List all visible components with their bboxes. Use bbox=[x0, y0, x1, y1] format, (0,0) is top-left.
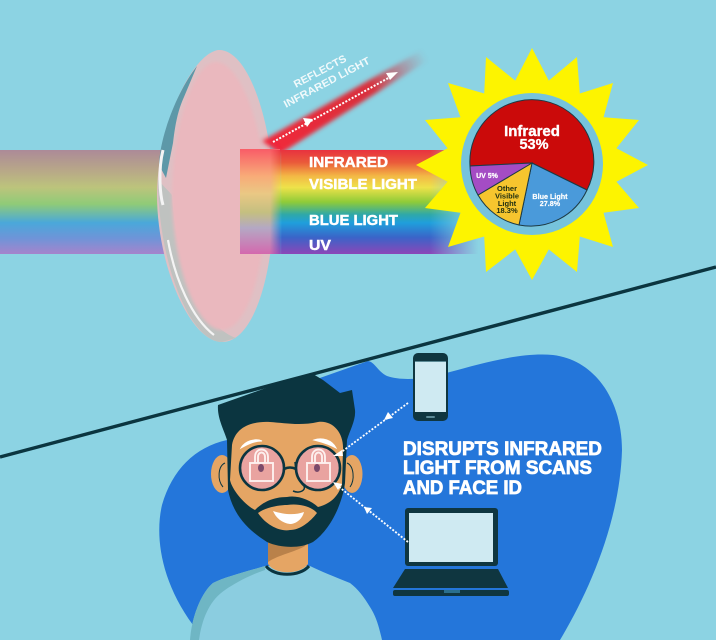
face bbox=[230, 422, 343, 510]
rainbow light beam entering lens bbox=[0, 150, 170, 254]
disrupts caption: LIGHT FROM SCANS bbox=[403, 457, 592, 479]
chin skin bbox=[258, 504, 317, 530]
lens bbox=[157, 50, 274, 342]
shirt bbox=[190, 566, 382, 640]
pie labels: Blue Light bbox=[532, 192, 568, 201]
reflects label: REFLECTS bbox=[292, 53, 349, 91]
divider line bbox=[0, 267, 716, 457]
band labels: INFRARED bbox=[309, 155, 388, 171]
band labels bbox=[309, 155, 417, 254]
band labels: VISIBLE LIGHT bbox=[309, 177, 417, 193]
glasses bbox=[240, 446, 340, 490]
disrupts caption bbox=[403, 438, 602, 499]
ears bbox=[211, 455, 362, 493]
pie labels: 18.3% bbox=[496, 206, 518, 215]
dotted arrow: reflected ray bbox=[273, 72, 398, 142]
sun with pie chart bbox=[416, 48, 648, 280]
rainbow band inside lens bbox=[240, 149, 280, 254]
band labels: UV bbox=[309, 238, 331, 254]
disrupts caption: DISRUPTS INFRARED bbox=[403, 438, 602, 460]
pie labels: 27.8% bbox=[540, 199, 561, 208]
dotted arrow: phone to eye bbox=[333, 403, 408, 456]
eye dots bbox=[258, 464, 264, 472]
pie chart bbox=[470, 100, 594, 226]
laptop icon bbox=[393, 508, 509, 596]
pie labels: Light bbox=[498, 199, 517, 208]
neck bbox=[268, 535, 308, 572]
nose bbox=[293, 462, 304, 492]
band labels: BLUE LIGHT bbox=[309, 213, 398, 229]
pie labels: 53% bbox=[519, 137, 549, 153]
reflected infrared beam bbox=[262, 50, 430, 154]
collar bbox=[266, 566, 309, 574]
eyebrows bbox=[241, 440, 262, 448]
pie labels: Other bbox=[497, 184, 517, 193]
pie ring bbox=[461, 93, 603, 235]
disrupts caption: AND FACE ID bbox=[403, 477, 522, 499]
blue blob bbox=[159, 355, 622, 640]
pie labels: Visible bbox=[495, 192, 519, 200]
man illustration bbox=[190, 374, 382, 640]
sun rays bbox=[416, 48, 648, 280]
reflects label: INFRARED LIGHT bbox=[282, 55, 373, 111]
mouth bbox=[273, 511, 304, 524]
pie labels: UV 5% bbox=[476, 173, 499, 180]
hair and beard bbox=[218, 374, 355, 547]
right lock icon bbox=[307, 450, 330, 481]
rainbow band after lens bbox=[270, 150, 482, 254]
left lock icon bbox=[250, 450, 273, 481]
pie labels bbox=[476, 123, 568, 215]
phone icon bbox=[413, 353, 448, 421]
dotted arrow: laptop to eye bbox=[333, 482, 408, 542]
pie labels: Infrared bbox=[504, 123, 560, 140]
